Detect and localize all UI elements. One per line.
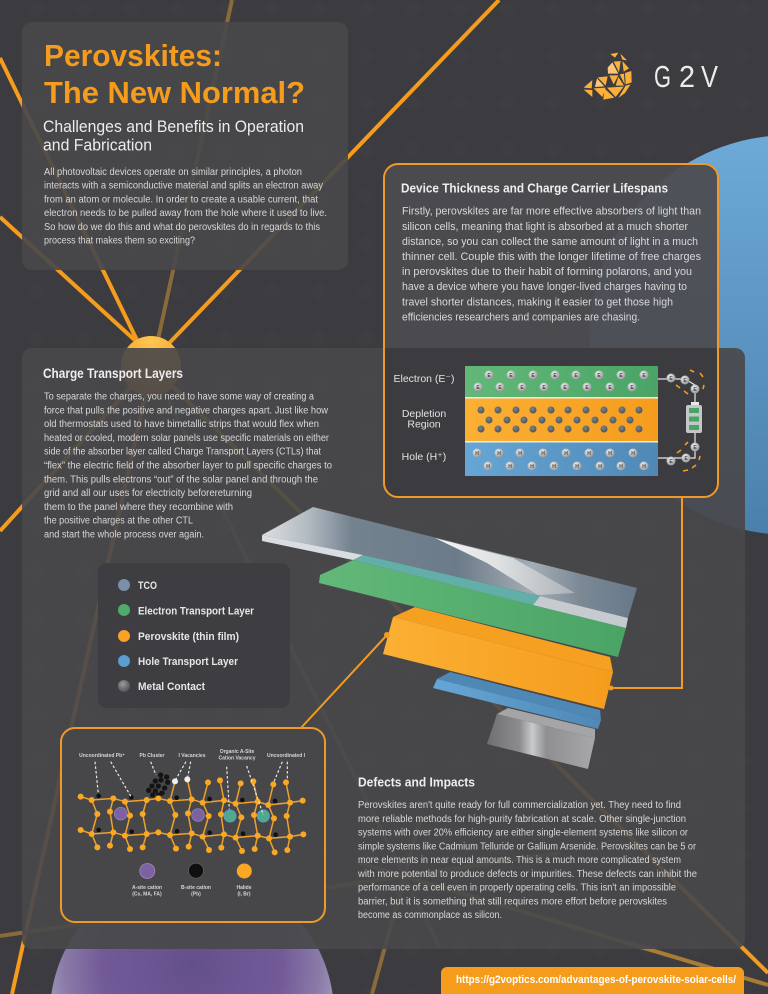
layer bands (465, 366, 658, 476)
TCO glass (262, 507, 637, 628)
text block: device thickness: thinner cell. Couple this with the longer lifetime of free charges (402, 251, 702, 263)
intro text: electron needs to be pulled away from the hole where it used to live. (44, 208, 327, 219)
connector: stack to device panel (611, 495, 682, 688)
panel: defects crystal (61, 728, 325, 922)
panel: intro (22, 22, 348, 270)
text block: defects: with more potential to produce defects or impurities. These defects can inhibit the (357, 869, 698, 880)
electrons: E (553, 373, 557, 379)
crystal lattice (78, 762, 306, 855)
legend labels: Electron Transport Layer (138, 606, 255, 618)
electrons: E (509, 373, 513, 379)
holes: H (564, 451, 568, 457)
holes: H (518, 451, 522, 457)
text block: charge transport: them. This pulls electrons “out” of the solar panel and through the (44, 474, 318, 485)
blue circle decoration (590, 136, 768, 534)
title: The New Normal? (44, 75, 305, 110)
legend dot: HTL (118, 655, 130, 667)
electrons: E (563, 385, 567, 391)
sun (121, 336, 181, 396)
electrons: E (574, 373, 578, 379)
holes: H (486, 464, 490, 470)
title (44, 38, 305, 110)
legend dot: metal (118, 680, 130, 692)
heading: device thickness: Device Thickness and Charge Carrier Lifespans (401, 182, 668, 196)
Pb cluster (146, 772, 170, 798)
holes: H (587, 451, 591, 457)
wordmark: 2 (679, 59, 695, 94)
holes: H (575, 464, 579, 470)
text block: charge transport: side of the absorber layer called Charge Transport Layers (CTLs) that (44, 447, 321, 458)
crystal legend: B-site cation (181, 885, 211, 891)
connector: perovskite to defects box (300, 632, 390, 729)
text block: device thickness: efficiencies researchers and companies are chasing. (402, 311, 640, 323)
text block: device thickness: travel shorter distances, making it easier to get those high (402, 296, 673, 308)
electrons: E (476, 385, 480, 391)
legend labels: TCO (138, 580, 157, 592)
connector dot: right (608, 686, 614, 690)
title: Perovskites: (44, 38, 222, 73)
diagram labels: Region (407, 418, 441, 430)
holes: H (541, 451, 545, 457)
electrons: E (642, 373, 646, 379)
subtitle (43, 118, 304, 155)
electrons: E (487, 373, 491, 379)
text block: device thickness: silicon cells, meaning that light is absorbed at a much shorter (402, 221, 688, 233)
wordmark: V (701, 59, 718, 94)
text block: charge transport: the positive charges at the other CTL (44, 516, 194, 527)
intro text: So how do we do this and what do perovskites do in regards to this (44, 222, 320, 233)
text block: charge transport: To separate the charges, you need to have some way of creating a (44, 392, 315, 402)
panel: charge transport layers (22, 348, 745, 949)
crystal legend: (I, Br) (237, 892, 251, 898)
circuit wire lower (658, 433, 695, 458)
text block: charge transport: heated or cooled, modern solar panels use specific materials on either (44, 433, 330, 444)
legend labels: Perovskite (thin film) (138, 631, 239, 643)
layer stack illustration (262, 507, 637, 769)
A-site cations (114, 807, 204, 821)
crystal labels: I Vacancies (179, 753, 206, 759)
electron transport layer (319, 560, 626, 657)
wordmark: G (654, 59, 671, 94)
crystal labels: Organic A-Site (220, 749, 254, 755)
electrons: E (630, 385, 634, 391)
electrons (474, 370, 648, 392)
text block: defects (357, 800, 698, 921)
holes: H (530, 464, 534, 470)
circuit charges: E (684, 456, 688, 462)
text block: defects: barrier, but it is something that still requires more effort before perovskites (358, 896, 667, 907)
crystal labels (79, 749, 306, 762)
legend dot: perovskite (118, 630, 130, 642)
heading: defects: Defects and Impacts (358, 775, 475, 790)
text block: device thickness: distance, so you can collect the same amount of light in a much (402, 236, 698, 248)
crystal legend: (Pb) (191, 892, 201, 898)
legend labels: Hole Transport Layer (138, 656, 239, 668)
text block: charge transport: “flex” the electric field of the absorber layer to pull specific charges to (44, 460, 332, 472)
circuit charges: E (683, 378, 687, 384)
diagram labels (394, 373, 454, 463)
crystal legend: A-site cation (132, 885, 162, 891)
diagram labels: Hole (H⁺) (402, 451, 446, 463)
crystal labels: Uncoordinated Pb⁺ (79, 753, 125, 759)
text block: defects: become as commonplace as silicon. (358, 910, 502, 921)
motion arrows (676, 370, 704, 471)
circuit charges: E (693, 445, 697, 451)
crystal legend: (Cs, MA, FA) (132, 892, 162, 898)
subtitle: and Fabrication (43, 137, 152, 155)
crystal labels: Cation Vacancy (219, 756, 256, 762)
text block: charge transport: them to the panel where they recombine with (44, 502, 233, 513)
logo: G2V (584, 53, 718, 100)
holes: H (552, 464, 556, 470)
electrons: E (585, 385, 589, 391)
electrons: E (619, 373, 623, 379)
purple circle decoration (51, 872, 333, 994)
text block: defects: Perovskites aren't quite ready for full commercialization yet. They need to find (358, 800, 681, 811)
crystal legend: Halide (236, 885, 252, 891)
electrons: E (531, 373, 535, 379)
text block: device thickness: Firstly, perovskites are far more effective absorbers of light than (402, 206, 701, 218)
holes: H (642, 464, 646, 470)
text block: defects: simple systems like Cadmium Telluride or Gallium Arsenide. Perovskites can be 5 or (358, 841, 697, 852)
intro text: All photovoltaic devices operate on similar principles, a photon (44, 167, 302, 178)
text block: charge transport: grid and all our uses for electricity beforereturning (44, 488, 252, 499)
text block: defects: more reliable methods for high-purity fabrication at scale. Other single-junction (358, 814, 686, 825)
text block: defects: more elements in near equal amounts. This is a much more complicated system (358, 855, 681, 866)
panel: device thickness (384, 164, 718, 497)
holes: H (475, 451, 479, 457)
halide atoms (78, 777, 306, 855)
circuit wire (658, 379, 695, 405)
crystal labels: Uncoordinated I (267, 753, 306, 759)
holes: H (497, 451, 501, 457)
wordmark (654, 59, 718, 94)
diagram labels: Depletion (402, 408, 446, 420)
text block: defects: systems with over 20% efficiency are either single-element systems like silicon or (358, 828, 689, 839)
lattice bonds (81, 779, 303, 852)
text block: device thickness: in perovskites due to their habit of forming polarons, and you (402, 266, 692, 278)
text block: charge transport: force that pulls the positive and negative charges apart. Just like how (44, 405, 329, 416)
metal contact (487, 708, 595, 769)
holes (472, 448, 648, 470)
section: defects and impacts (357, 775, 698, 921)
cation vacancies (224, 810, 269, 822)
text block: defects: performance of a cell even in properly operating cells. This isn't an impossible (358, 883, 677, 894)
hole transport layer (433, 672, 601, 729)
intro text: interacts with a semiconductive material and splits an electron away (44, 181, 323, 192)
url button (441, 967, 744, 994)
heading: charge transport layers: Charge Transport Layers (43, 366, 183, 381)
url button: https://g2voptics.com/advantages-of-perovskite-solar-cells/ (456, 974, 736, 986)
circuit charges: E (693, 387, 697, 393)
crystal labels: Pb Cluster (139, 753, 165, 759)
black B-site atoms (96, 794, 278, 837)
depletion atoms (478, 406, 642, 432)
legend labels (138, 580, 255, 693)
holes: H (508, 464, 512, 470)
iodide vacancies (172, 776, 190, 784)
electrons: E (498, 385, 502, 391)
legend dot: ETL (118, 604, 130, 616)
legend labels: Metal Contact (138, 681, 205, 693)
perovskite layer (383, 607, 613, 709)
dashed leader lines (95, 762, 287, 815)
electrons: E (608, 385, 612, 391)
circuit charges: E (669, 459, 673, 465)
subtitle: Challenges and Benefits in Operation (43, 118, 304, 136)
text block: charge transport: old thermostats used to have bimetallic strips that would flex when (44, 419, 319, 430)
holes: H (619, 464, 623, 470)
electrons: E (520, 385, 524, 391)
electrons: E (597, 373, 601, 379)
text block: charge transport (44, 392, 332, 540)
legend dots (118, 579, 130, 591)
circuit charges (666, 374, 700, 466)
holes: H (631, 451, 635, 457)
legend (98, 563, 290, 708)
circuit charges: E (669, 376, 673, 382)
diagram: charge layers (394, 366, 704, 476)
text block: device thickness: have a device where you have longer-lived charges having to (402, 281, 687, 293)
intro text (44, 167, 327, 247)
electrons: E (542, 385, 546, 391)
holes: H (598, 464, 602, 470)
holes: H (608, 451, 612, 457)
text block: device thickness (402, 206, 702, 323)
crystal legend (132, 863, 252, 898)
intro text: from an atom or molecule. In order to create a usable current, that (44, 194, 318, 205)
icon: battery (686, 402, 702, 433)
diagram labels: Electron (E⁻) (394, 373, 454, 385)
icon: faceted sphere (584, 53, 632, 100)
text block: charge transport: and start the whole process over again. (44, 530, 204, 540)
intro text: process that makes them so exciting? (44, 236, 196, 247)
